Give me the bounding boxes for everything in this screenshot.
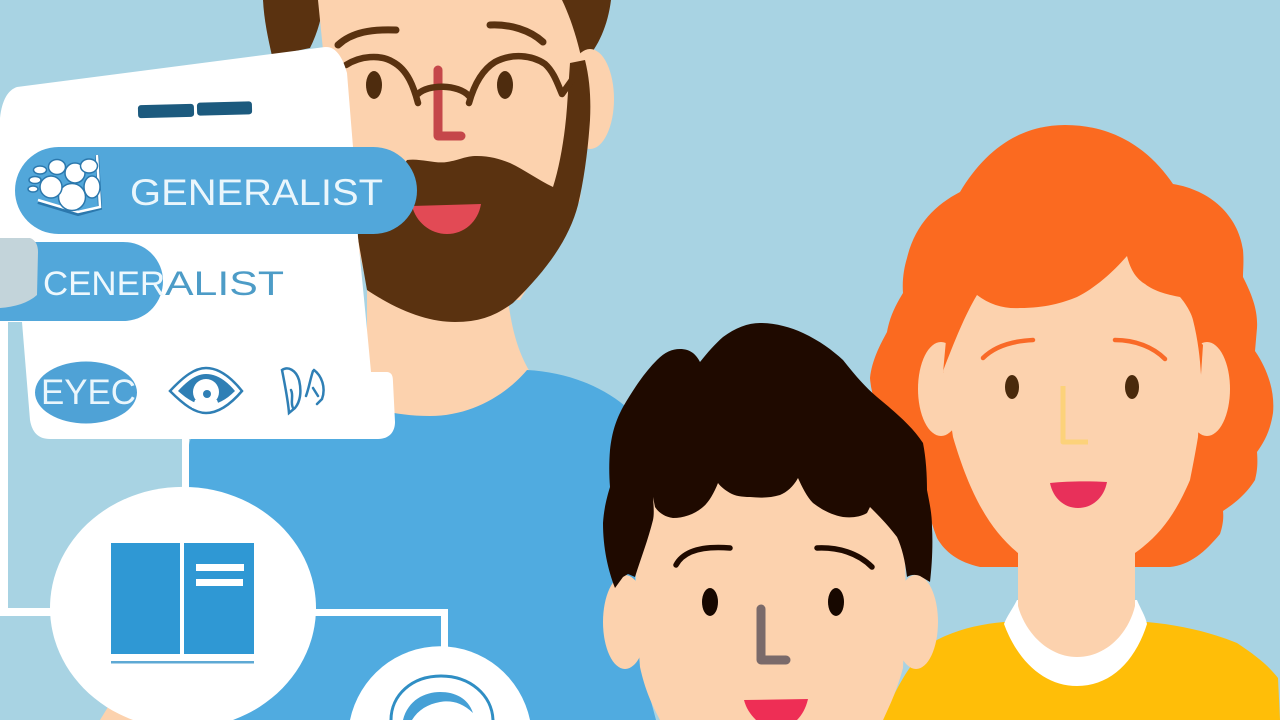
figure: man with beard and glasses (130, 0, 656, 720)
card body (0, 47, 395, 439)
badge: eyec (35, 362, 137, 424)
woman nose (1063, 386, 1088, 442)
pill text: GENERALIST (130, 172, 383, 213)
panel: diagram node with spiral (350, 646, 530, 720)
man eyebrows (338, 25, 543, 45)
man hair (263, 0, 611, 64)
man glasses (346, 56, 572, 103)
icon: spiral (391, 676, 493, 720)
panel: white phone card (0, 47, 417, 439)
woman neck (1018, 540, 1135, 657)
figure: woman with orange hair (870, 125, 1280, 720)
boy mouth (744, 699, 808, 720)
hand behind diagram circle (100, 707, 135, 720)
boy hair (603, 323, 932, 588)
woman face (943, 256, 1201, 553)
icon: ear scribble (282, 368, 324, 413)
boy face (635, 470, 906, 720)
icon: foot tiles (28, 155, 100, 214)
woman collar (1004, 600, 1147, 686)
woman ears (918, 342, 1230, 436)
man eyes (366, 71, 513, 99)
man beard (357, 60, 590, 322)
icon: eye (170, 368, 242, 413)
connector lines (0, 300, 448, 654)
boy eyes (702, 588, 844, 616)
woman hair (870, 125, 1273, 567)
boy ears (603, 575, 938, 669)
man face (318, 0, 588, 300)
pill: generalist secondary (0, 238, 284, 321)
man nose (438, 70, 461, 136)
pill text white part: CENER (43, 265, 165, 303)
icon: book (111, 543, 254, 664)
woman eyes (1005, 375, 1139, 399)
man neck (367, 280, 530, 425)
pill text blue part: ALIST (165, 265, 284, 303)
man mouth (412, 204, 481, 234)
icon: grey tile (0, 238, 38, 308)
woman eyebrows (983, 340, 1165, 359)
card header bars (138, 101, 252, 118)
pill: generalist primary (15, 147, 417, 234)
woman shirt (883, 622, 1280, 720)
boy nose (761, 609, 786, 660)
badge: eyec: EYEC (41, 373, 136, 412)
woman mouth (1050, 481, 1107, 508)
man ear (566, 49, 614, 149)
man shirt (130, 370, 656, 720)
panel: diagram node with book (50, 487, 316, 720)
figure: boy with dark hair (603, 323, 938, 720)
boy eyebrows (676, 548, 872, 567)
woman hair wedges by ears (943, 330, 1203, 375)
